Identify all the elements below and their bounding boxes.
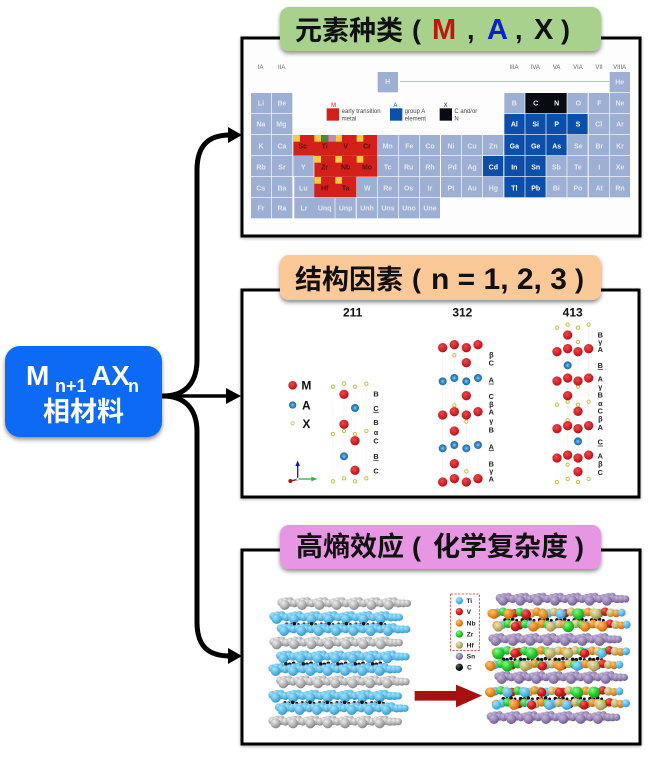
atomic model: high entropy: [485, 593, 631, 724]
group labels: VA: [553, 65, 560, 71]
element labels: Unp: [339, 205, 352, 212]
structure 312: γ: [489, 467, 494, 476]
legend: M A X: metal: [342, 116, 356, 122]
periodic table: In: [511, 164, 517, 171]
structure 413: A: [598, 345, 604, 354]
group labels: IIIA: [510, 65, 518, 71]
element labels: Unq: [318, 205, 331, 212]
structure 312: A: [489, 376, 495, 385]
panel: element types: [242, 38, 640, 236]
element labels: Rb: [256, 164, 266, 171]
element labels: Ne: [616, 101, 625, 108]
element labels: Tc: [384, 164, 392, 171]
element labels: Co: [425, 143, 435, 150]
box: MAX phase material: n+1: [55, 376, 87, 396]
element labels: F: [597, 101, 602, 108]
element labels: Bi: [553, 185, 560, 192]
legend: M A X: N: [454, 116, 459, 122]
legend: elements: Nb: [467, 620, 476, 627]
structure 211: C: [373, 404, 379, 413]
element labels: At: [596, 185, 604, 192]
structure 312: A: [489, 475, 495, 484]
group labels: IIA: [278, 65, 285, 71]
structure headers: 413: [563, 306, 583, 320]
element labels: Kr: [616, 143, 624, 150]
heading: structure factor: ): [575, 264, 584, 294]
heading: element types: X: [534, 14, 554, 46]
legend: M A X: A: [393, 103, 397, 109]
element labels: Te: [574, 164, 582, 171]
heading: high entropy effect: 化学复杂度: [433, 532, 568, 562]
element labels: Ca: [278, 143, 287, 150]
element labels: Cu: [467, 143, 477, 150]
heading: high entropy effect: (: [412, 532, 421, 562]
periodic table: Cr: [363, 143, 371, 150]
element labels: Ni: [447, 143, 455, 150]
element labels: Na: [257, 122, 266, 129]
periodic table: Al: [511, 122, 518, 129]
element labels: Os: [404, 185, 413, 192]
structure 211: B: [373, 418, 379, 427]
periodic table: [251, 65, 630, 218]
periodic table: C: [533, 101, 538, 108]
element labels: Mg: [276, 122, 286, 129]
structure 413: B: [598, 391, 603, 400]
legend: M A X: group A: [405, 109, 425, 115]
heading: element types: ,: [515, 15, 523, 45]
element labels: Au: [467, 185, 477, 192]
structure 211: C: [373, 436, 379, 445]
atom legend: X: [302, 417, 310, 431]
box: MAX phase material: AX: [91, 360, 130, 391]
heading: high entropy effect: 高熵效应: [296, 532, 404, 562]
element labels: Po: [574, 185, 582, 192]
box: MAX phase material: [5, 346, 162, 437]
legend: elements: Sn: [467, 654, 475, 661]
structure 413: B: [598, 331, 603, 340]
crystal structures: [288, 306, 604, 487]
element labels: Se: [574, 143, 583, 150]
atom legend: M: [301, 379, 311, 393]
element labels: Sr: [278, 164, 286, 171]
periodic table: Ti: [322, 143, 328, 150]
structure 413: C: [598, 438, 604, 447]
structure 211: [331, 382, 379, 483]
structure 312: B: [489, 426, 494, 435]
group labels: VII: [595, 65, 603, 71]
element labels: O: [576, 101, 582, 108]
element labels: Pt: [448, 185, 455, 192]
heading: element types: A: [487, 14, 508, 46]
heading: structure factor: [280, 255, 601, 300]
periodic table: Sn: [531, 164, 540, 171]
element labels: Fe: [405, 143, 414, 150]
element labels: Br: [595, 143, 603, 150]
structure 211: B: [373, 452, 379, 461]
box: MAX phase material: 相材料: [43, 397, 124, 427]
atom legend: A: [302, 398, 311, 412]
periodic table: As: [552, 143, 561, 150]
box: MAX phase material: n: [128, 376, 139, 396]
structure 312: B: [489, 459, 494, 468]
element labels: Rh: [425, 164, 435, 171]
structure 312: A: [489, 407, 495, 416]
element labels: Unh: [360, 205, 374, 212]
element labels: [256, 79, 625, 212]
heading: high entropy effect: [280, 525, 601, 569]
structure 312: β: [489, 400, 494, 409]
box: MAX phase material: M: [26, 360, 49, 391]
legend: elements: V: [467, 609, 472, 616]
arrow: connectors: [163, 127, 242, 664]
heading: structure factor: 结构因素: [295, 265, 403, 295]
structure 312: A: [489, 442, 495, 451]
periodic table: Ga: [510, 143, 519, 150]
group labels: IA: [258, 65, 264, 71]
periodic table: Sc: [298, 143, 307, 150]
element labels: Lr: [300, 205, 308, 212]
element labels: I: [598, 164, 600, 171]
element labels: Mn: [383, 143, 393, 150]
element labels: Fr: [257, 205, 265, 212]
legend: M A X: M: [331, 103, 336, 109]
structure 413: β: [598, 415, 603, 424]
element labels: Uno: [402, 205, 416, 212]
legend: elements: C: [467, 665, 472, 672]
group labels: VIA: [573, 65, 583, 71]
structure 312: β: [489, 350, 494, 359]
heading: structure factor: (: [412, 264, 421, 294]
element labels: Ar: [616, 122, 624, 129]
periodic table: Si: [532, 122, 539, 129]
element labels: Ra: [278, 205, 287, 212]
periodic table: Tl: [511, 185, 517, 192]
element labels: Zn: [489, 143, 498, 150]
element labels: K: [258, 143, 264, 150]
structure 413: γ: [598, 338, 603, 347]
structure 312: C: [489, 392, 495, 401]
arrow: to high entropy: [415, 685, 482, 707]
heading: element types: M: [432, 14, 456, 46]
heading: element types: [280, 7, 601, 51]
heading: element types: ): [561, 15, 570, 45]
element labels: Pd: [448, 164, 457, 171]
legend: M A X: element: [405, 116, 426, 122]
structure 312: C: [489, 358, 495, 367]
element labels: Uns: [381, 205, 395, 212]
element labels: Y: [301, 164, 306, 171]
element labels: Ba: [278, 185, 287, 192]
periodic table: Ge: [531, 143, 540, 150]
structure headers: 211: [343, 306, 363, 320]
element labels: Rn: [615, 185, 625, 192]
element labels: Xe: [616, 164, 624, 171]
periodic table: Pb: [531, 185, 540, 192]
periodic table: V: [343, 143, 348, 150]
periodic table: Zr: [321, 164, 328, 171]
periodic table: Mo: [362, 164, 372, 171]
structure headers: [343, 306, 583, 320]
element labels: Cs: [256, 185, 265, 192]
periodic table: Hf: [321, 185, 329, 192]
group labels: VIIIA: [613, 65, 626, 71]
element labels: Ru: [404, 164, 413, 171]
structure 211: C: [373, 466, 379, 475]
atom legend: [288, 379, 311, 431]
structure 413: α: [598, 399, 603, 408]
legend: M A X: X: [444, 103, 448, 109]
element labels: Cl: [595, 122, 602, 129]
atomic model: Ti-Sn-C: [268, 597, 411, 728]
structure 312: [438, 340, 495, 487]
periodic table: P: [554, 122, 559, 129]
structure 413: [552, 323, 604, 484]
group labels: IVA: [531, 65, 540, 71]
structure 413: β: [598, 460, 603, 469]
heading: element types: ,: [467, 15, 475, 45]
element labels: Sb: [552, 164, 561, 171]
structure 413: γ: [598, 382, 603, 391]
element labels: Ag: [467, 164, 477, 171]
element labels: Be: [278, 101, 287, 108]
legend: elements: [451, 594, 479, 672]
structure 413: A: [598, 451, 604, 460]
heading: element types: (: [412, 15, 421, 45]
element labels: Hg: [489, 185, 498, 192]
group labels: [258, 65, 626, 71]
element labels: Li: [258, 101, 264, 108]
legend: elements: Zr: [467, 631, 474, 638]
legend: elements: Hf: [467, 642, 474, 649]
element labels: Une: [423, 205, 437, 212]
legend: M A X: [327, 103, 477, 122]
heading: high entropy effect: ): [575, 532, 584, 562]
element labels: Lu: [299, 185, 308, 192]
axes: [288, 461, 317, 483]
heading: structure factor: n = 1, 2, 3: [431, 263, 567, 296]
element labels: B: [512, 101, 517, 108]
structure headers: 312: [452, 306, 473, 320]
structure 413: B: [598, 361, 603, 370]
element labels: W: [364, 185, 371, 192]
structure 211: B: [373, 390, 379, 399]
element labels: Ir: [428, 185, 433, 192]
legend: M A X: C and/or: [454, 109, 477, 115]
structure 413: A: [598, 423, 604, 432]
panel: high entropy effect: [242, 550, 640, 744]
structure 312: γ: [489, 417, 494, 426]
structure 413: A: [598, 374, 604, 383]
legend: M A X: early transition: [342, 109, 381, 115]
element labels: H: [385, 79, 390, 86]
element labels: Re: [383, 185, 392, 192]
periodic table: Cd: [489, 164, 498, 171]
panel: structure factor: [242, 290, 639, 497]
periodic table: Nb: [341, 164, 350, 171]
periodic table: Ta: [342, 185, 350, 192]
structure 211: α: [374, 428, 379, 437]
element labels: He: [615, 80, 624, 87]
periodic table: N: [554, 101, 559, 108]
legend: elements: Ti: [466, 598, 472, 605]
heading: element types: 元素种类: [295, 16, 403, 46]
structure 413: C: [598, 468, 604, 477]
periodic table: S: [576, 122, 581, 129]
structure 413: C: [598, 407, 604, 416]
